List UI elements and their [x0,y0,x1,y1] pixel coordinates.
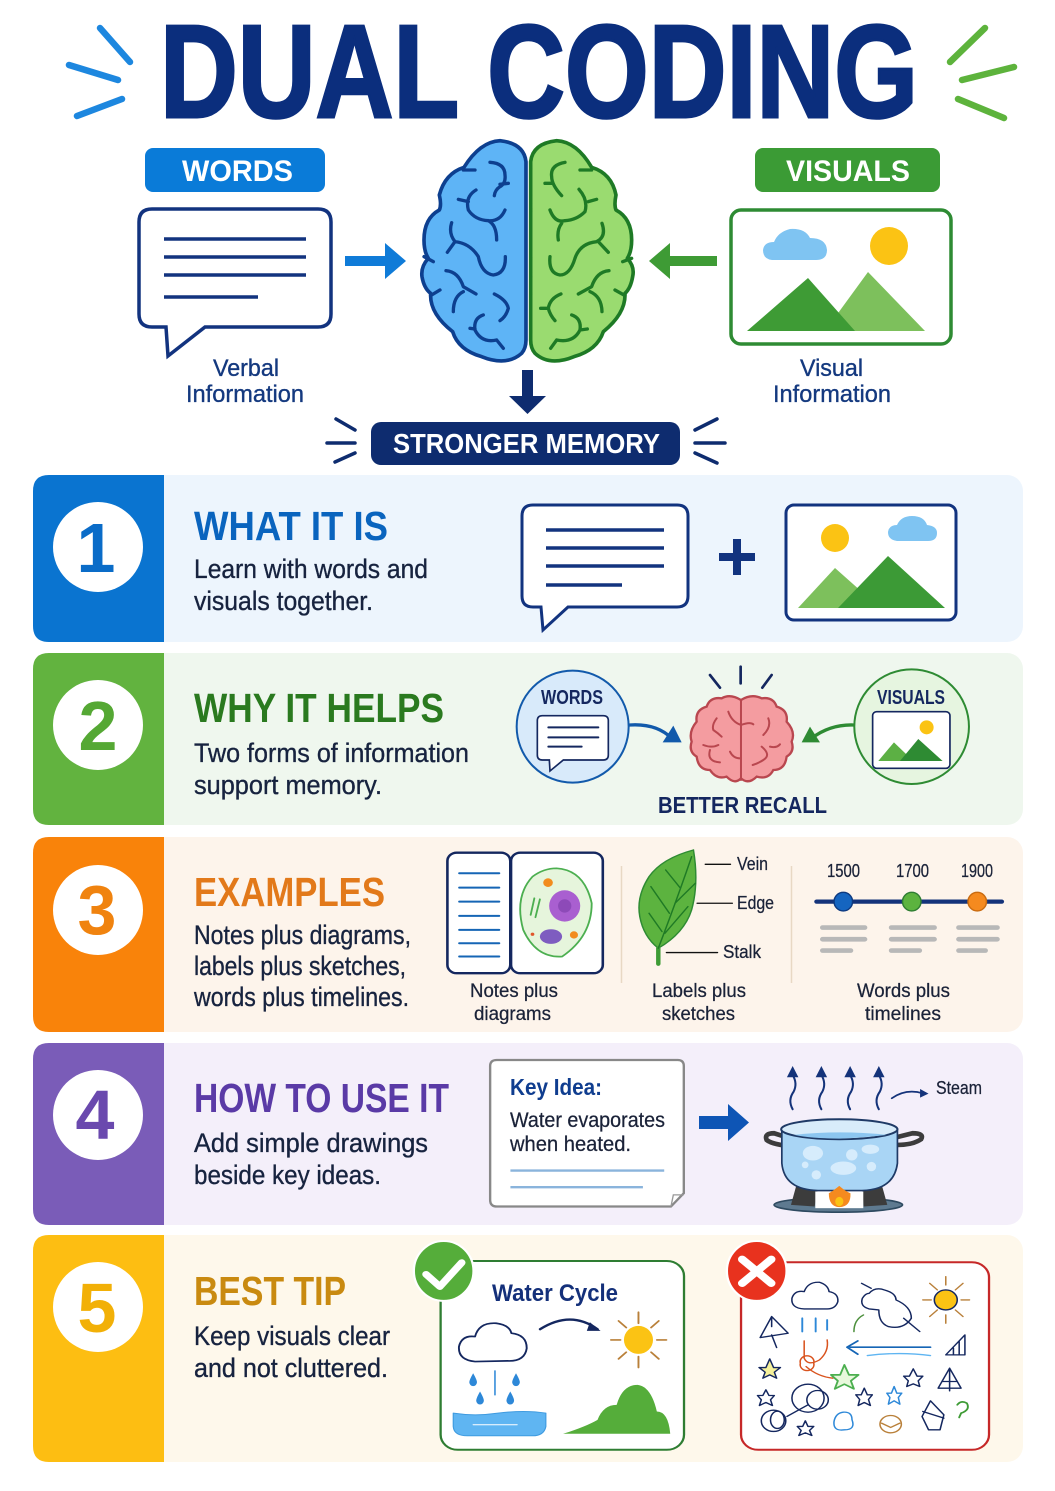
timeline years: 1500 [827,861,860,881]
description: Learn with words and [194,554,428,584]
verbal information label [186,355,304,408]
arrow: visuals to brain [649,243,717,279]
icon: leaf [639,850,732,964]
diagram: words and visuals to recall [517,667,969,784]
leaf labels: Edge [737,893,774,913]
number 3: 3 [78,871,116,949]
timeline [817,892,1002,951]
visuals column [731,148,951,408]
description [194,1321,390,1383]
panel: examples [33,837,1023,1032]
visual information label: Information [773,381,891,408]
number 1 [53,502,143,592]
description: words plus timelines. [193,982,409,1012]
notes plus diagrams caption: Notes plus [470,980,558,1002]
icon: landscape picture [731,210,951,344]
description [193,920,411,1012]
panel: why it helps [33,653,1023,825]
labels plus sketches caption [652,980,746,1025]
icon: brain [422,141,633,361]
heading: EXAMPLES [194,869,385,915]
decorative green rays [950,28,1014,118]
panel: what it is [33,475,1023,642]
icon: speech bubble [522,505,688,630]
description: Keep visuals clear [194,1321,390,1351]
visuals pill: VISUALS [786,155,910,188]
leaf labels: Vein [737,854,768,874]
icon: plus [719,539,755,575]
arrow: brain to memory [509,370,546,414]
number 2 [53,680,143,770]
steam label: Steam [936,1078,982,1098]
description: labels plus sketches, [194,951,406,981]
stronger memory pill: STRONGER MEMORY [393,428,660,459]
number 5: 5 [78,1269,116,1347]
better recall label: BETTER RECALL [658,792,827,818]
visuals pill [755,148,940,192]
words circle label: WORDS [541,687,603,709]
description [194,738,469,800]
description: support memory. [194,770,382,800]
number 1: 1 [77,509,115,587]
heading: WHAT IT IS [194,503,388,549]
stronger memory pill [371,422,680,465]
decorative divider [622,866,792,983]
labels plus sketches caption: Labels plus [652,980,746,1002]
icon: speech bubble [139,209,331,356]
panel: how to use it [33,1043,1023,1225]
water cycle title: Water Cycle [492,1280,618,1307]
arrow: words to brain [345,243,406,279]
description: Add simple drawings [194,1128,428,1158]
key idea note: Key Idea: [510,1074,602,1100]
description: and not cluttered. [194,1353,388,1383]
memory rays [327,419,725,463]
icon: notebook with cell diagram [447,853,603,973]
icon: landscape picture [786,505,956,620]
description: Notes plus diagrams, [194,920,411,950]
key idea note: when heated. [509,1132,631,1156]
timeline years: 1900 [961,861,993,881]
number 4 [53,1070,143,1160]
description: beside key ideas. [194,1160,381,1190]
notes plus diagrams caption: diagrams [474,1003,551,1025]
labels plus sketches caption: sketches [662,1003,735,1025]
words pill: WORDS [182,155,293,188]
timeline years [827,861,993,881]
description: Two forms of information [194,738,469,768]
leaf labels [723,854,774,962]
good example: clear water cycle [414,1241,684,1450]
heading: HOW TO USE IT [194,1075,449,1121]
verbal information label: Information [186,381,304,408]
leaf labels: Stalk [723,942,762,962]
visual information label [773,355,891,408]
panel: best tip [33,1235,1023,1462]
arrow: note to pot [699,1104,749,1141]
decorative blue rays [69,28,130,116]
description [194,1128,428,1190]
description [194,554,428,616]
description: visuals together. [194,586,373,616]
key idea note: Water evaporates [510,1108,665,1132]
timeline years: 1700 [896,861,929,881]
words plus timelines caption: timelines [865,1003,941,1025]
words plus timelines caption: Words plus [857,980,950,1002]
visuals circle label: VISUALS [877,687,945,709]
number 5 [53,1262,143,1352]
icon: boiling pot with steam [766,1066,929,1212]
number 2: 2 [79,687,117,765]
verbal information label: Verbal [213,355,279,382]
heading: BEST TIP [194,1268,346,1314]
words plus timelines caption [857,980,950,1025]
notes plus diagrams caption [470,980,558,1025]
number 3 [53,865,143,955]
words column [139,148,331,408]
number 4: 4 [76,1076,115,1154]
words pill [145,148,325,192]
visual information label: Visual [800,355,863,382]
key idea note [490,1060,684,1207]
heading: WHY IT HELPS [194,685,444,731]
bad example: cluttered doodles [727,1241,989,1450]
